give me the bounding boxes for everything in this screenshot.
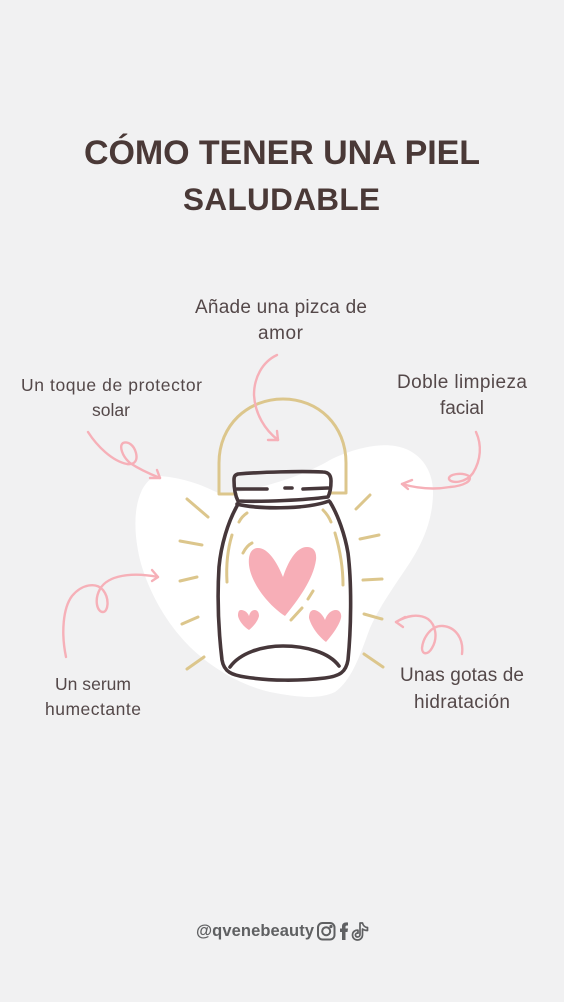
label: Unas gotas de hidratación <box>400 665 524 713</box>
label: Un serum humectante: humectante <box>45 699 141 719</box>
jar highlights <box>227 510 343 620</box>
label: Un serum humectante: Un serum <box>55 674 131 694</box>
icon: tiktok <box>352 923 368 940</box>
label: Unas gotas de hidratación: hidratación <box>414 692 510 713</box>
label: Un serum humectante <box>45 674 141 719</box>
label: Un toque de protector solar <box>21 375 202 420</box>
jar handle <box>219 399 346 494</box>
icon: facebook <box>340 922 348 940</box>
arrow: top <box>254 355 278 440</box>
arrow: lower right <box>396 616 462 654</box>
small left heart <box>238 610 259 630</box>
label: Añade una pizca de amor: amor <box>258 323 304 344</box>
title: CÓMO TENER UNA PIEL <box>84 134 480 172</box>
large heart <box>249 547 316 616</box>
title: SALUDABLE <box>183 181 380 217</box>
title <box>84 134 480 217</box>
jar illustration <box>180 399 383 680</box>
label: Doble limpieza facial <box>397 372 527 419</box>
jar lid <box>234 472 331 501</box>
label: Añade una pizca de amor <box>195 297 367 344</box>
label: Añade una pizca de amor: Añade una pizca de <box>195 297 367 318</box>
arrow: lower left <box>63 570 158 657</box>
jar body <box>218 502 351 680</box>
label: Unas gotas de hidratación: Unas gotas de <box>400 665 524 686</box>
light rays <box>180 495 383 669</box>
white background blob <box>135 445 433 697</box>
arrow: upper left <box>88 432 160 478</box>
label: Un toque de protector solar: Un toque de protector <box>21 375 202 395</box>
jar neck and bottom <box>230 501 339 667</box>
footer handle: @qvenebeauty <box>196 922 315 940</box>
small right heart <box>309 610 341 642</box>
label: Doble limpieza facial: facial <box>440 398 484 419</box>
label: Un toque de protector solar: solar <box>92 400 130 420</box>
label: Doble limpieza facial: Doble limpieza <box>397 372 527 393</box>
arrow: upper right <box>402 432 480 489</box>
icon: instagram <box>318 923 334 940</box>
